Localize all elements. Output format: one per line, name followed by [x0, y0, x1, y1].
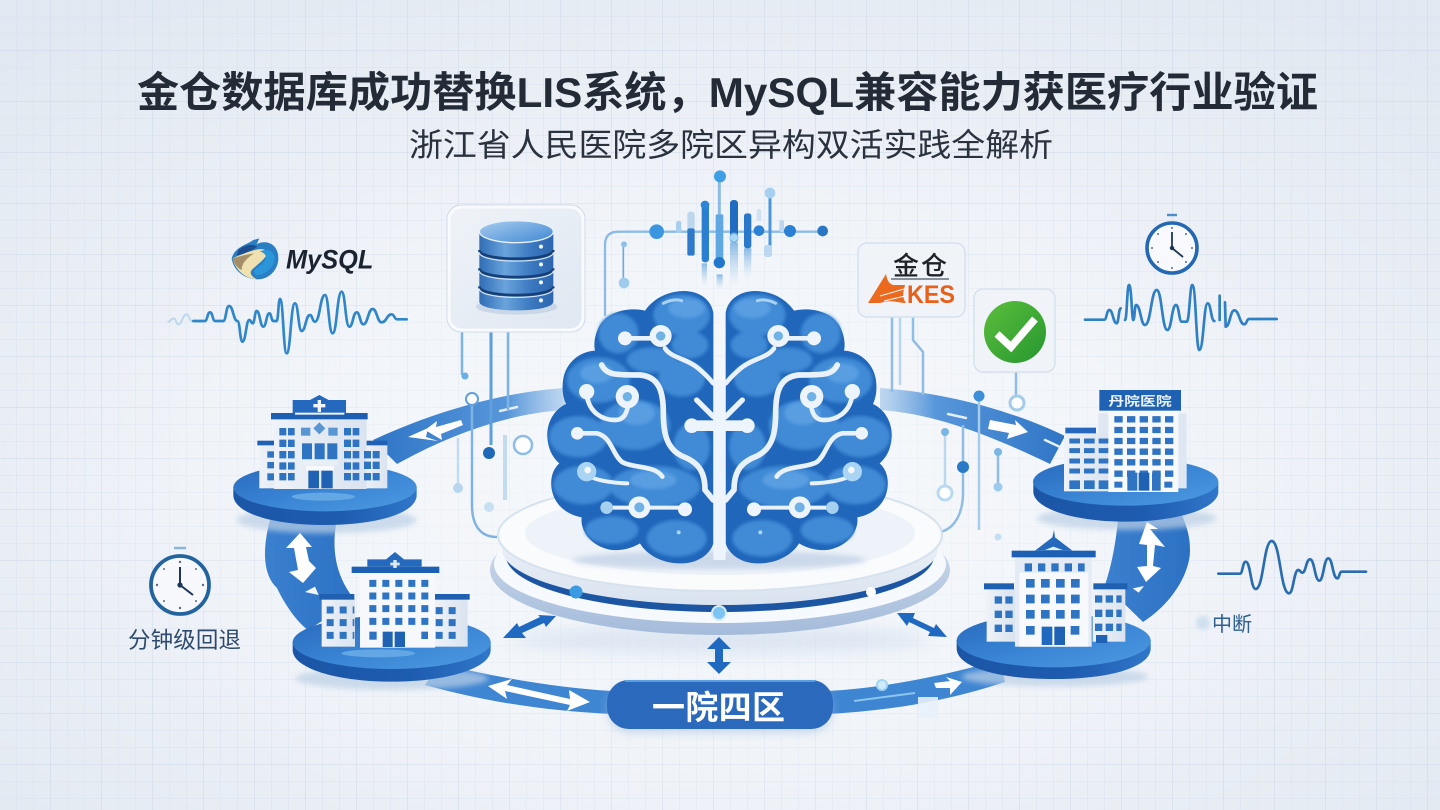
label: 中断: [1196, 613, 1252, 636]
soft shadow: [573, 551, 866, 569]
arrow: small head on right ribbon: [1133, 586, 1144, 593]
arrow: platform to label: [707, 637, 731, 674]
left hemisphere: [547, 291, 713, 563]
disk: lower left: [293, 616, 491, 690]
icon: database cylinder: [476, 221, 557, 315]
arrow: left vertical: [286, 533, 316, 583]
sign: 丹院医院: [1108, 393, 1172, 408]
right hemisphere: [726, 291, 892, 563]
building: upper right: [1064, 390, 1187, 492]
verification check card: [974, 289, 1055, 372]
arrows on ribbon: white: [286, 420, 1165, 711]
connector lines left of the brain: [453, 330, 537, 537]
MySQL logo: [232, 238, 373, 279]
arrow: platform to right campus: [897, 613, 947, 637]
building: lower right: [984, 530, 1127, 647]
disk: upper right: [1033, 458, 1218, 530]
label: 中断: 中断: [1212, 613, 1252, 636]
arrow: upper right: [988, 420, 1028, 439]
database card: [447, 205, 585, 332]
arrow: right vertical: [1137, 522, 1165, 582]
lower right ribbon detail: [854, 680, 938, 718]
arrow: small head on left ribbon: [305, 587, 319, 595]
building: lower left: [319, 552, 470, 648]
waveform: upper right: [1085, 285, 1277, 350]
arrow: platform to left campus: [503, 615, 556, 638]
waveform: left: [168, 292, 407, 353]
brain with circuit lines: [547, 291, 892, 569]
ribbon: upper right: [880, 388, 1065, 464]
ribbon: upper left: [373, 388, 565, 464]
logo text: MySQL: MySQL: [286, 244, 373, 274]
top signal waveform: [605, 170, 828, 315]
ribbon: left side: [265, 520, 355, 630]
disk: lower right: [957, 614, 1151, 687]
logo mark: orange wing: [868, 274, 906, 303]
ring ribbon connecting campuses: [265, 388, 1190, 714]
icon: clock top right: [1147, 215, 1197, 273]
title: 金仓数据库成功替换LIS系统，MySQL兼容能力获医疗行业验证: [137, 69, 1318, 116]
ribbon: right side: [1105, 515, 1190, 622]
label pill: 一院四区: [607, 680, 833, 732]
logo text: 金仓: 金仓: [893, 246, 947, 283]
arrows around platform: blue: [503, 613, 947, 674]
label: 分钟级回退: 分钟级回退: [128, 628, 241, 653]
label pill: 一院四区: 一院四区: [652, 689, 785, 726]
logo text: KES: KES: [907, 281, 955, 309]
central trunk: [684, 380, 755, 560]
waveform: lower right: [1218, 541, 1366, 593]
arrow: lower right: [934, 677, 962, 695]
arrow: lower left: [488, 679, 590, 711]
central platform: [490, 479, 950, 654]
building: upper left: [257, 395, 387, 489]
connector lines right of the brain: [892, 317, 1024, 540]
disk: upper left: [233, 463, 417, 533]
icon: green check: [984, 301, 1046, 363]
right campuses: [957, 390, 1218, 687]
icon: dolphin swirl: [232, 238, 278, 279]
platform nodes: [570, 586, 876, 620]
ribbon: lower right: [828, 660, 1005, 714]
ribbon dashes: [500, 407, 1060, 447]
icon: clock left: [151, 548, 209, 614]
arrow: upper left: [408, 420, 463, 441]
ribbon: lower left: [425, 664, 612, 714]
KES logo card: [858, 243, 965, 317]
left campuses: [233, 395, 491, 690]
subtitle: 浙江省人民医院多院区异构双活实践全解析: [409, 127, 1053, 163]
